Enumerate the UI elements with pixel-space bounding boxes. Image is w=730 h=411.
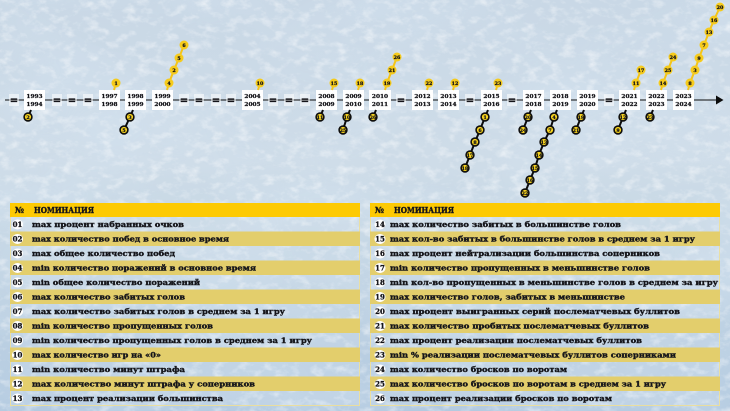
marker stack 2015: 18 <box>462 166 469 172</box>
skipped seasons markers: = <box>508 96 516 106</box>
marker stack 2021: 17 <box>638 68 644 74</box>
row 15 <box>370 232 720 246</box>
marker stack 2023: 20 <box>717 5 724 11</box>
marker stack 2012: 22 <box>426 81 432 87</box>
row 15: 15 <box>375 234 385 244</box>
marker stack 2018: 14 <box>536 153 543 159</box>
season 2004-2005: 2005 <box>244 102 261 108</box>
row 22: max процент реализации послематчевых буллитов <box>390 336 642 345</box>
season 2023-2024: 2024 <box>675 102 692 108</box>
marker stack 2023: 8 <box>688 81 692 87</box>
marker stack 2010 <box>382 52 402 90</box>
skipped seasons markers: = <box>195 96 203 106</box>
table header right: № <box>375 205 384 215</box>
season 2008-2009: 2008 <box>318 94 335 100</box>
row 11: 11 <box>13 365 22 374</box>
season 2013-2014: 2014 <box>440 102 457 108</box>
season 2021-2022: 2022 <box>621 102 638 108</box>
season 2021-2022: 2021 <box>621 94 638 100</box>
table header right: НОМИНАЦИЯ <box>394 205 455 215</box>
marker stack 2019: 19 <box>578 115 585 121</box>
row 25 <box>370 376 720 391</box>
table header left: НОМИНАЦИЯ <box>34 205 95 215</box>
marker stack 2021: 11 <box>633 81 639 87</box>
row 01: max процент набранных очков <box>32 220 184 229</box>
marker stack 1998 <box>119 110 135 135</box>
row 02 <box>10 232 360 246</box>
skipped seasons markers: = <box>397 96 405 106</box>
table header left: № <box>15 205 24 215</box>
marker stack 2015: 23 <box>495 81 502 87</box>
marker stack 2017: 24 <box>520 128 527 134</box>
marker stack 2008: 11 <box>317 115 323 121</box>
marker stack 2015: 8 <box>473 140 477 146</box>
season 1997-1998 <box>99 90 120 110</box>
season 2015-2016: 2016 <box>483 102 500 108</box>
marker stack 2008 <box>330 78 338 90</box>
skipped seasons markers: = <box>605 96 613 106</box>
marker stack 2021 <box>632 66 646 90</box>
row 07: max количество забитых голов в среднем за 1 игру <box>32 307 285 316</box>
marker stack 2010: 26 <box>394 55 401 61</box>
season 2010-2011: 2011 <box>372 102 388 108</box>
yellow markers above the timeline <box>112 2 724 90</box>
marker stack 2015: 1 <box>483 115 487 121</box>
row 03: max общее количество побед <box>32 249 175 258</box>
marker stack 2022: 25 <box>665 68 671 74</box>
season 2015-2016: 2015 <box>483 94 500 100</box>
season 2019-2020: 2019 <box>579 94 596 100</box>
row 15: max кол-во забитых в большинстве голов в среднем за 1 игру <box>390 235 695 244</box>
season 2022-2023 <box>646 90 667 110</box>
season 1997-1998: 1998 <box>101 102 118 108</box>
row 18: min кол-во пропущенных в меньшинстве голов в среднем за игру <box>390 278 718 287</box>
season 2019-2020 <box>577 90 598 110</box>
skipped seasons markers: = <box>10 96 18 106</box>
skipped seasons markers: = <box>285 96 293 106</box>
row 14: 14 <box>375 220 385 229</box>
season 1998-1999: 1998 <box>127 94 144 100</box>
season 1993-1994: 1993 <box>26 94 43 100</box>
season 2009-2010: 2010 <box>345 102 362 108</box>
season 2015-2016 <box>481 90 502 110</box>
row 03: 03 <box>13 249 22 258</box>
marker stack 2018 <box>520 110 559 198</box>
season 2017-2018: 2018 <box>525 102 542 108</box>
marker stack 2023 <box>686 2 724 90</box>
skipped seasons markers: = <box>180 96 188 106</box>
row 11 <box>10 362 360 376</box>
row 04: 04 <box>13 264 22 272</box>
row 16: max процент нейтрализации большинства соперников <box>390 249 660 258</box>
marker stack 2009: 25 <box>340 128 346 134</box>
row 21: 21 <box>375 322 385 330</box>
marker stack 1999: 4 <box>167 81 171 87</box>
season 2018-2019 <box>550 90 571 110</box>
row 14: max количество забитых в большинстве голов <box>390 220 621 229</box>
skipped seasons markers: = <box>84 96 92 106</box>
marker stack 1999: 2 <box>172 68 176 74</box>
season 1999-2000 <box>152 90 173 110</box>
marker stack 2018: 22 <box>522 191 528 197</box>
row 10: 10 <box>13 350 22 360</box>
table: nominations 14-26 <box>370 203 720 406</box>
row 07: 07 <box>13 307 22 316</box>
row 03 <box>10 246 360 260</box>
row 11: min количество минут штрафа <box>32 365 185 374</box>
season 2009-2010 <box>343 90 364 110</box>
row 13: max процент реализации большинства <box>32 394 223 403</box>
marker stack 2022: 23 <box>647 115 654 121</box>
marker stack 2018: 13 <box>541 140 548 146</box>
marker stack 2021 <box>613 110 628 135</box>
row 10 <box>10 348 360 362</box>
row 23: 23 <box>375 350 385 360</box>
row 06 <box>10 290 360 304</box>
season 2019-2020: 2020 <box>579 102 596 108</box>
row 16 <box>370 246 720 260</box>
row 01 <box>10 217 360 232</box>
row 23 <box>370 348 720 362</box>
skipped seasons markers: = <box>301 96 309 106</box>
row 04: min количество поражений в основное время <box>32 264 256 273</box>
season 2022-2023: 2023 <box>648 102 665 108</box>
season 2004-2005: 2004 <box>244 94 261 100</box>
row 09: 09 <box>13 336 22 345</box>
row 19 <box>370 290 720 304</box>
row 17: min количество пропущенных в меньшинстве голов <box>390 264 650 273</box>
table header right <box>370 203 720 217</box>
marker stack 2009: 10 <box>344 115 351 121</box>
marker stack 2022 <box>658 52 678 90</box>
marker stack 2023: 3 <box>693 68 697 74</box>
row 26: max процент реализации бросков по воротам <box>390 394 612 403</box>
season 2022-2023: 2022 <box>648 94 665 100</box>
row 21: max количество пробитых послематчевых буллитов <box>390 322 649 331</box>
marker stack 2015 <box>460 110 490 173</box>
row 13 <box>10 391 360 406</box>
row 08: min количество пропущенных голов <box>32 322 213 331</box>
season 1999-2000: 2000 <box>154 102 171 108</box>
row 23: min % реализации послематчевых буллитов соперниками <box>390 351 676 360</box>
marker stack 1993 <box>23 110 33 122</box>
row 05: 05 <box>13 278 22 287</box>
skipped seasons markers: = <box>212 96 220 106</box>
season 2023-2024 <box>673 90 694 110</box>
skipped seasons markers: = <box>466 96 474 106</box>
row 22: 22 <box>375 336 385 345</box>
season 2004-2005 <box>242 90 263 110</box>
marker stack 2019 <box>571 110 586 135</box>
marker stack 2023: 13 <box>706 30 713 36</box>
skipped seasons markers: = <box>53 96 61 106</box>
marker stack 2013 <box>450 78 460 90</box>
season 2013-2014 <box>438 90 459 110</box>
row 06: 06 <box>13 292 22 302</box>
season 2010-2011: 2010 <box>372 94 388 100</box>
season 1999-2000: 1999 <box>154 94 171 100</box>
skipped seasons markers: = <box>269 96 277 106</box>
arrow head <box>716 96 724 104</box>
row 25: 25 <box>375 380 385 388</box>
row 22 <box>370 333 720 348</box>
marker stack 2010: 21 <box>389 68 395 74</box>
season 2017-2018: 2017 <box>525 94 542 100</box>
marker stack 2004: 10 <box>257 81 264 87</box>
season 2012-2013: 2013 <box>414 102 431 108</box>
row 07 <box>10 304 360 318</box>
season 1998-1999 <box>125 90 146 110</box>
season 2009-2010: 2009 <box>345 94 362 100</box>
row 01: 01 <box>13 220 22 229</box>
marker stack 2010 <box>368 110 378 122</box>
marker stack 2023: 9 <box>697 56 701 62</box>
skipped seasons markers <box>9 94 614 106</box>
row 13: 13 <box>13 394 22 403</box>
row 12: max количество минут штрафа у соперников <box>32 380 255 389</box>
row 26: 26 <box>375 394 385 403</box>
row 20: 20 <box>375 307 385 316</box>
row 16: 16 <box>375 249 385 258</box>
row 24 <box>370 362 720 376</box>
row 17 <box>370 260 720 275</box>
row 26 <box>370 391 720 406</box>
row 12: 12 <box>13 380 22 388</box>
season 2012-2013: 2012 <box>414 94 431 100</box>
marker stack 2021: 9 <box>616 128 620 134</box>
season 1993-1994: 1994 <box>26 102 43 108</box>
marker stack 2022: 24 <box>670 55 677 61</box>
marker stack 2022 <box>645 110 655 122</box>
season 2008-2009 <box>316 90 337 110</box>
season 2013-2014: 2013 <box>440 94 457 100</box>
row 18 <box>370 275 720 290</box>
row 08: 08 <box>13 322 22 330</box>
marker stack 1999: 5 <box>177 56 181 62</box>
row 09: min количество пропущенных голов в среднем за 1 игру <box>32 336 312 345</box>
marker stack 2018: 16 <box>527 178 534 184</box>
marker stack 2023: 7 <box>702 43 706 49</box>
season 1997-1998: 1997 <box>101 94 118 100</box>
marker stack 2017: 20 <box>525 115 532 121</box>
marker stack 2013: 12 <box>452 81 458 87</box>
marker stack 2018: 15 <box>532 166 538 172</box>
season 2010-2011 <box>369 90 391 110</box>
marker stack 2012 <box>424 78 434 90</box>
marker stack 2009 <box>356 78 364 90</box>
marker stack 2017 <box>518 110 533 135</box>
season 1998-1999: 1999 <box>127 102 144 108</box>
season 2018-2019: 2018 <box>552 94 569 100</box>
marker stack 1993: 2 <box>26 115 30 121</box>
row 08 <box>10 318 360 333</box>
marker stack 2015: 17 <box>467 153 473 159</box>
row 19: 19 <box>375 292 385 302</box>
marker stack 1998: 3 <box>128 115 132 121</box>
row 05 <box>10 275 360 290</box>
marker stack 2010: 26 <box>370 115 377 121</box>
marker stack 1997 <box>112 78 120 90</box>
row 20 <box>370 304 720 318</box>
marker stack 2009 <box>338 110 352 135</box>
row 17: 17 <box>375 264 385 272</box>
season 2018-2019: 2019 <box>552 102 569 108</box>
season 2008-2009: 2009 <box>318 102 335 108</box>
row 09 <box>10 333 360 348</box>
timeline <box>5 90 724 110</box>
row 20: max процент выигранных серий послематчевых буллитов <box>390 307 680 316</box>
marker stack 2004 <box>256 78 264 90</box>
row 19: max количество голов, забитых в меньшинстве <box>390 293 625 302</box>
row 21 <box>370 318 720 333</box>
marker stack 1999: 6 <box>182 43 186 49</box>
marker stack 2015 <box>494 78 502 90</box>
row 24: max количество бросков по воротам <box>390 365 567 374</box>
table header left <box>10 203 360 217</box>
marker stack 2023: 16 <box>711 18 718 24</box>
row 02: max количество побед в основное время <box>32 235 229 244</box>
marker stack 2018: 4 <box>552 115 556 121</box>
row 05: min общее количество поражений <box>32 278 200 287</box>
row 02: 02 <box>13 234 22 244</box>
marker stack 2019: 21 <box>573 128 579 134</box>
skipped seasons markers: = <box>68 96 76 106</box>
season 1993-1994 <box>24 90 45 110</box>
season 2012-2013 <box>412 90 433 110</box>
row 04 <box>10 260 360 275</box>
marker stack 2010: 19 <box>384 81 391 87</box>
marker stack 2015: 6 <box>478 128 482 134</box>
marker stack 2008: 15 <box>331 81 337 87</box>
marker stack 2009: 18 <box>357 81 364 87</box>
season 2017-2018 <box>523 90 544 110</box>
marker stack 1999 <box>164 40 188 90</box>
marker stack 1998: 5 <box>122 128 126 134</box>
skipped seasons markers: = <box>227 96 235 106</box>
marker stack 2021: 12 <box>620 115 626 121</box>
row 12 <box>10 376 360 391</box>
marker stack 2022: 14 <box>660 81 667 87</box>
row 06: max количество забитых голов <box>32 293 185 302</box>
black markers below the timeline <box>23 110 655 198</box>
marker stack 2008 <box>315 110 325 122</box>
row 10: max количество игр на «0» <box>32 351 161 360</box>
row 18: 18 <box>375 278 385 287</box>
row 14 <box>370 217 720 232</box>
season 2023-2024: 2023 <box>675 94 692 100</box>
marker stack 2018: 7 <box>548 128 552 134</box>
row 24: 24 <box>375 365 385 374</box>
season 2021-2022 <box>619 90 640 110</box>
table: nominations 01-13 <box>10 203 360 406</box>
marker stack 1997: 1 <box>114 81 118 87</box>
row 25: max количество бросков по воротам в среднем за 1 игру <box>390 380 666 389</box>
